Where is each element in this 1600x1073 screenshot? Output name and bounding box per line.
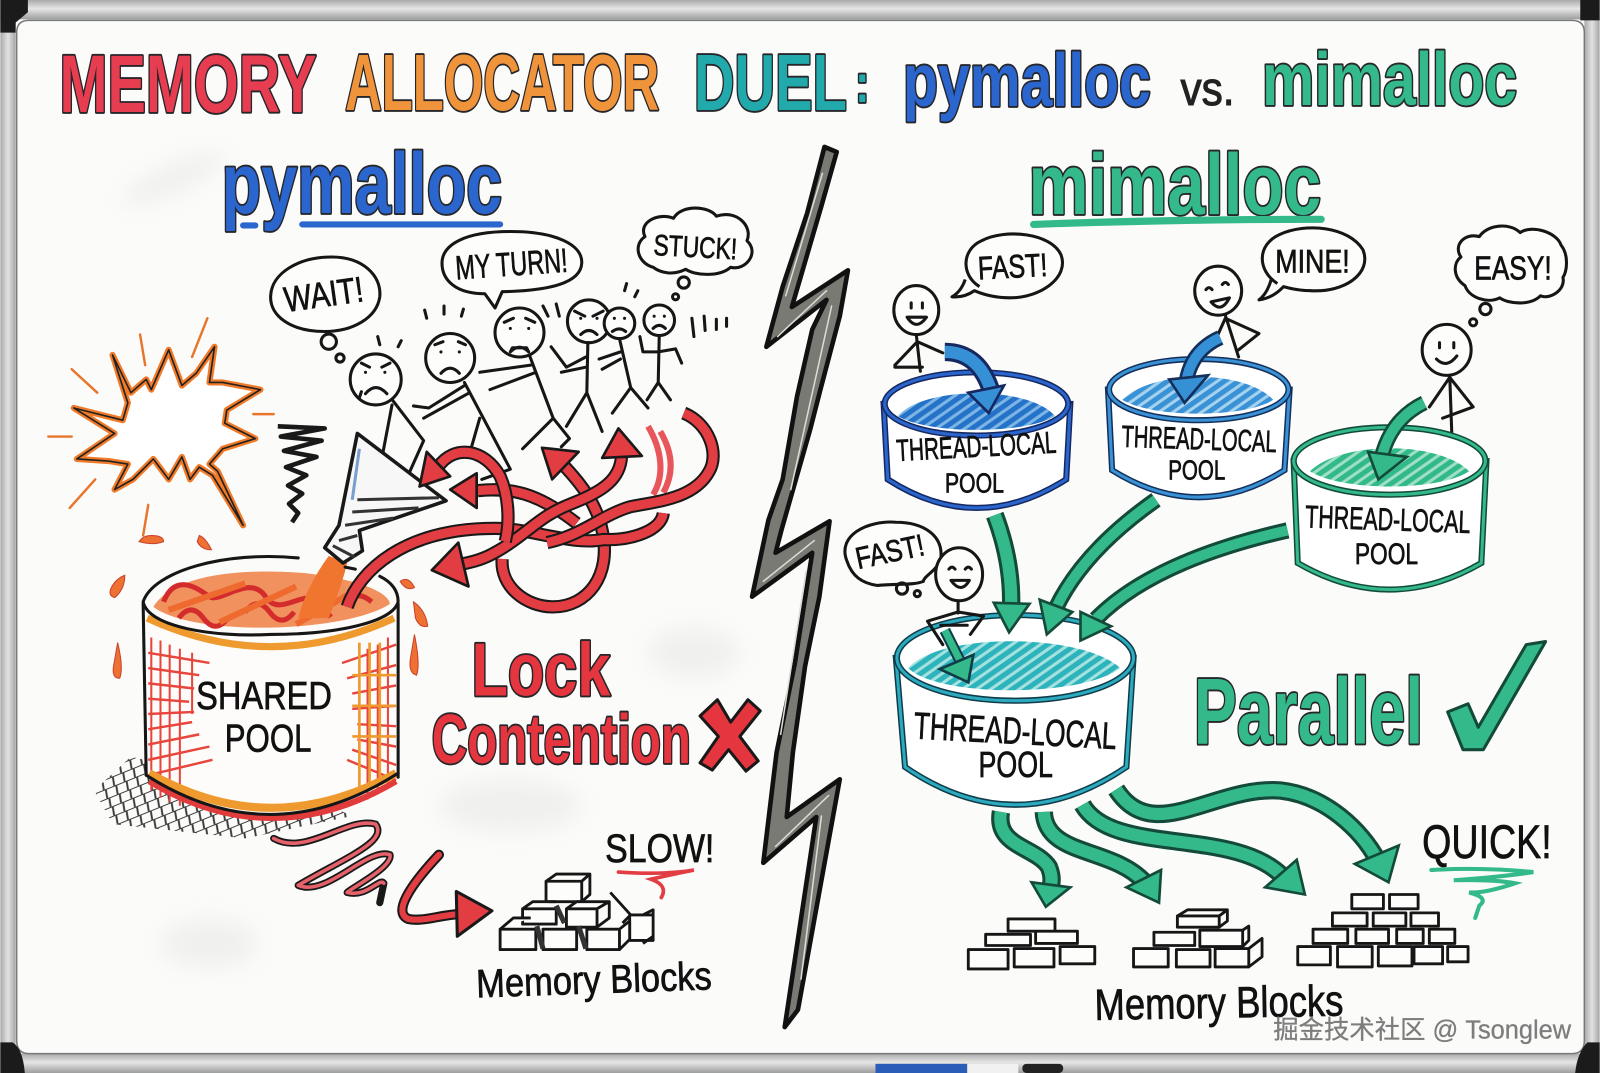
brick pile 1 <box>968 919 1095 969</box>
title <box>60 37 1517 130</box>
arrow: into pool 1 <box>945 352 1004 413</box>
title: : <box>855 52 869 114</box>
stick figure 2 <box>413 334 510 479</box>
label: Memory Blocks: Memory Blocks <box>1094 977 1344 1030</box>
stick figure 3 <box>480 308 569 449</box>
arrow: pool 1 to pool 4 <box>994 515 1029 632</box>
big upper right arrow <box>547 413 713 543</box>
pot body <box>143 602 398 816</box>
speech bubble: WAIT <box>271 257 380 362</box>
arrow pointing at the funnel <box>438 452 508 542</box>
label: SLOW: SLOW! <box>605 827 714 871</box>
label: SLOW <box>605 827 714 898</box>
pool 1: blue <box>884 372 1070 508</box>
arrow: into pool 3 <box>1368 403 1424 479</box>
arrow: pool 4 to blocks C <box>1083 805 1305 895</box>
pool 3: green: POOL <box>1355 538 1418 571</box>
title: vs. <box>1180 63 1235 115</box>
shared pool pot: POOL <box>225 718 311 761</box>
heading: pymalloc: pymalloc <box>222 136 502 232</box>
green and blue flow arrows <box>940 338 1424 907</box>
stick figure 1 <box>350 354 424 479</box>
arrow: pool 4 to blocks B <box>1044 812 1161 903</box>
looping lower arrow <box>502 465 604 607</box>
title: pymalloc <box>903 38 1151 122</box>
stick figure 4 <box>551 300 610 431</box>
arrow: into pool 2 <box>1169 338 1220 403</box>
boiling contents <box>153 571 390 628</box>
title: DUEL <box>694 38 847 127</box>
speech bubble: MINE: MINE! <box>1275 242 1350 279</box>
heading: mimalloc: mimalloc <box>1028 137 1321 233</box>
arrow: pool 4 to blocks D <box>1116 789 1399 882</box>
happy figure B <box>1195 266 1259 357</box>
pool 4: teal: POOL <box>978 745 1053 785</box>
arrow: pool 4 to blocks A <box>1000 812 1070 907</box>
label: SHARED <box>196 675 332 718</box>
text: Lock Contention with X mark <box>432 628 760 778</box>
motion and sweat marks <box>378 284 727 347</box>
label: QUICK: QUICK! <box>1422 816 1552 868</box>
arrow pointing left <box>478 490 577 523</box>
pool 4: teal <box>896 615 1134 805</box>
pool 2: light blue <box>1108 359 1290 497</box>
shared pool pot <box>94 535 428 838</box>
brick pile 2 <box>1134 910 1262 967</box>
pool 2: light blue: POOL <box>1168 454 1225 485</box>
tangled red arrows <box>347 413 713 607</box>
explosion burst <box>48 318 274 535</box>
pool 1: blue: POOL <box>945 468 1004 499</box>
title: ALLOCATOR <box>345 38 659 127</box>
marker pens on the tray <box>875 1064 1063 1073</box>
thought bubble: STUCK: STUCK! <box>653 229 738 266</box>
thought bubble: FAST (pool 4): FAST! <box>853 528 927 576</box>
text: Lock Contention with X mark: Contention <box>432 700 691 778</box>
title: MEMORY <box>60 39 317 130</box>
thought bubble: STUCK <box>638 208 752 300</box>
thought bubble: EASY: EASY! <box>1474 250 1552 287</box>
brick pile 3 <box>1298 895 1468 967</box>
long arrow from the pot <box>347 513 663 607</box>
title: mimalloc <box>1262 37 1517 121</box>
pot rim <box>143 556 398 635</box>
panel: mimalloc side <box>845 137 1567 1030</box>
thought bubble: FAST (pool 4) <box>845 522 941 597</box>
speech bubble: FAST: FAST! <box>977 246 1048 286</box>
pool 2: light blue: THREAD-LOCAL <box>1121 420 1277 459</box>
speech bubble: WAIT: WAIT! <box>281 269 366 320</box>
floor shadow <box>94 757 352 838</box>
arrow: into pool 4 <box>940 630 973 682</box>
speech bubble: MY TURN: MY TURN! <box>454 243 569 287</box>
black scribble <box>278 426 325 522</box>
pile of memory blocks <box>500 874 653 950</box>
panel: pymalloc side <box>48 136 760 1007</box>
queue of stressed stick figures <box>350 284 727 479</box>
label: QUICK <box>1422 816 1552 918</box>
faded motion strokes <box>648 426 671 495</box>
speech bubble: MY TURN <box>442 232 582 308</box>
stick figure 5 <box>599 308 648 413</box>
red arrow heads <box>420 428 642 586</box>
happy figure D <box>927 548 984 645</box>
happy figure C <box>1422 324 1473 432</box>
squiggly slow arrow <box>274 823 492 936</box>
speech bubble: FAST <box>952 234 1063 298</box>
thought bubble: EASY <box>1455 226 1567 326</box>
pool 4: teal: THREAD-LOCAL <box>913 704 1118 757</box>
arrow: pool 2 to pool 4 <box>1040 500 1156 634</box>
arrow pointing up <box>461 456 622 564</box>
watermark: 掘金技术社区 @ Tsonglew <box>1273 1016 1572 1044</box>
pool 3: green: THREAD-LOCAL <box>1305 498 1471 540</box>
funnel <box>325 433 446 563</box>
pool 1: blue: THREAD-LOCAL <box>895 426 1057 468</box>
label: Memory Blocks: Memory Blocks <box>475 954 712 1007</box>
text: Parallel with check mark: Parallel <box>1194 659 1423 764</box>
eraser smudges <box>117 142 740 968</box>
text: Lock Contention with X mark: Lock <box>472 628 611 712</box>
happy figure A <box>894 286 943 371</box>
arrow: pool 3 to pool 4 <box>1080 530 1288 641</box>
lightning divider <box>752 147 848 1027</box>
splash droplets <box>110 535 428 678</box>
stick figure 6 <box>640 305 682 400</box>
pool 3: green <box>1294 427 1486 590</box>
speech bubble: MINE <box>1259 228 1365 300</box>
